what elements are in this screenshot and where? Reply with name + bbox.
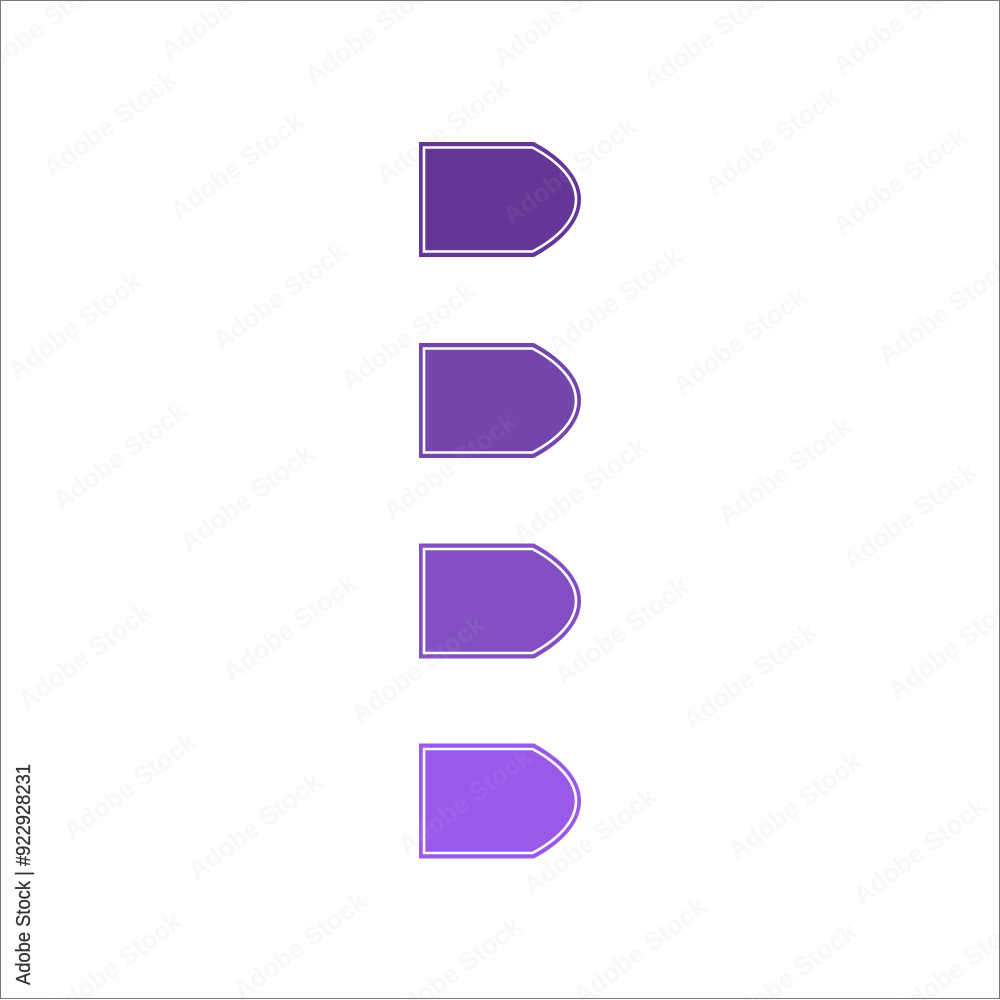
shape 2: medium dark purple tab xyxy=(419,343,581,458)
watermark pattern: Adobe Stock xyxy=(47,396,192,516)
watermark pattern: Adobe Stock xyxy=(517,781,662,901)
watermark pattern: Adobe Stock xyxy=(12,596,157,716)
watermark pattern: Adobe Stock xyxy=(182,766,327,886)
watermark pattern: Adobe Stock xyxy=(37,64,182,184)
watermark pattern: Adobe Stock xyxy=(722,746,867,866)
watermark overlay on shapes: Adobe Stock xyxy=(497,111,642,231)
shape 3: medium purple tab xyxy=(419,544,581,658)
watermark pattern: Adobe Stock xyxy=(217,568,362,688)
watermark overlay on shapes: Adobe Stock xyxy=(392,741,537,861)
watermark pattern: Adobe Stock xyxy=(827,121,972,241)
watermark overlay on shapes: Adobe Stock xyxy=(377,406,522,526)
watermark pattern: Adobe Stock xyxy=(549,571,694,691)
watermark pattern: Adobe Stock xyxy=(57,726,202,846)
watermark pattern: Adobe Stock xyxy=(837,456,982,576)
watermark pattern: Adobe Stock xyxy=(2,266,147,386)
watermark pattern: Adobe Stock xyxy=(207,236,352,356)
watermark pattern: Adobe Stock xyxy=(335,276,480,396)
watermark overlay on shapes xyxy=(345,111,642,861)
watermark pattern: Adobe Stock xyxy=(345,609,490,729)
watermark pattern: Adobe Stock xyxy=(542,241,687,361)
watermark pattern: Adobe Stock xyxy=(164,106,309,226)
watermark pattern: Adobe Stock xyxy=(377,406,522,526)
watermark pattern: Adobe Stock xyxy=(712,411,857,531)
watermark pattern: Adobe Stock xyxy=(174,438,319,558)
watermark pattern: Adobe Stock xyxy=(507,431,652,551)
shape 1: dark purple tab xyxy=(419,142,581,257)
watermark pattern: Adobe Stock xyxy=(370,71,515,191)
watermark pattern: Adobe Stock xyxy=(847,791,992,911)
watermark overlay on shapes: Adobe Stock xyxy=(345,609,490,729)
shape 4: light purple tab xyxy=(419,744,581,858)
watermark pattern: Adobe Stock xyxy=(497,111,642,231)
stock id label: Adobe Stock | #922928231 xyxy=(13,764,35,985)
watermark pattern: Adobe Stock xyxy=(699,81,844,201)
watermark pattern: Adobe Stock xyxy=(677,616,822,736)
watermark pattern: Adobe Stock xyxy=(667,281,812,401)
watermark pattern: Adobe Stock xyxy=(392,741,537,861)
